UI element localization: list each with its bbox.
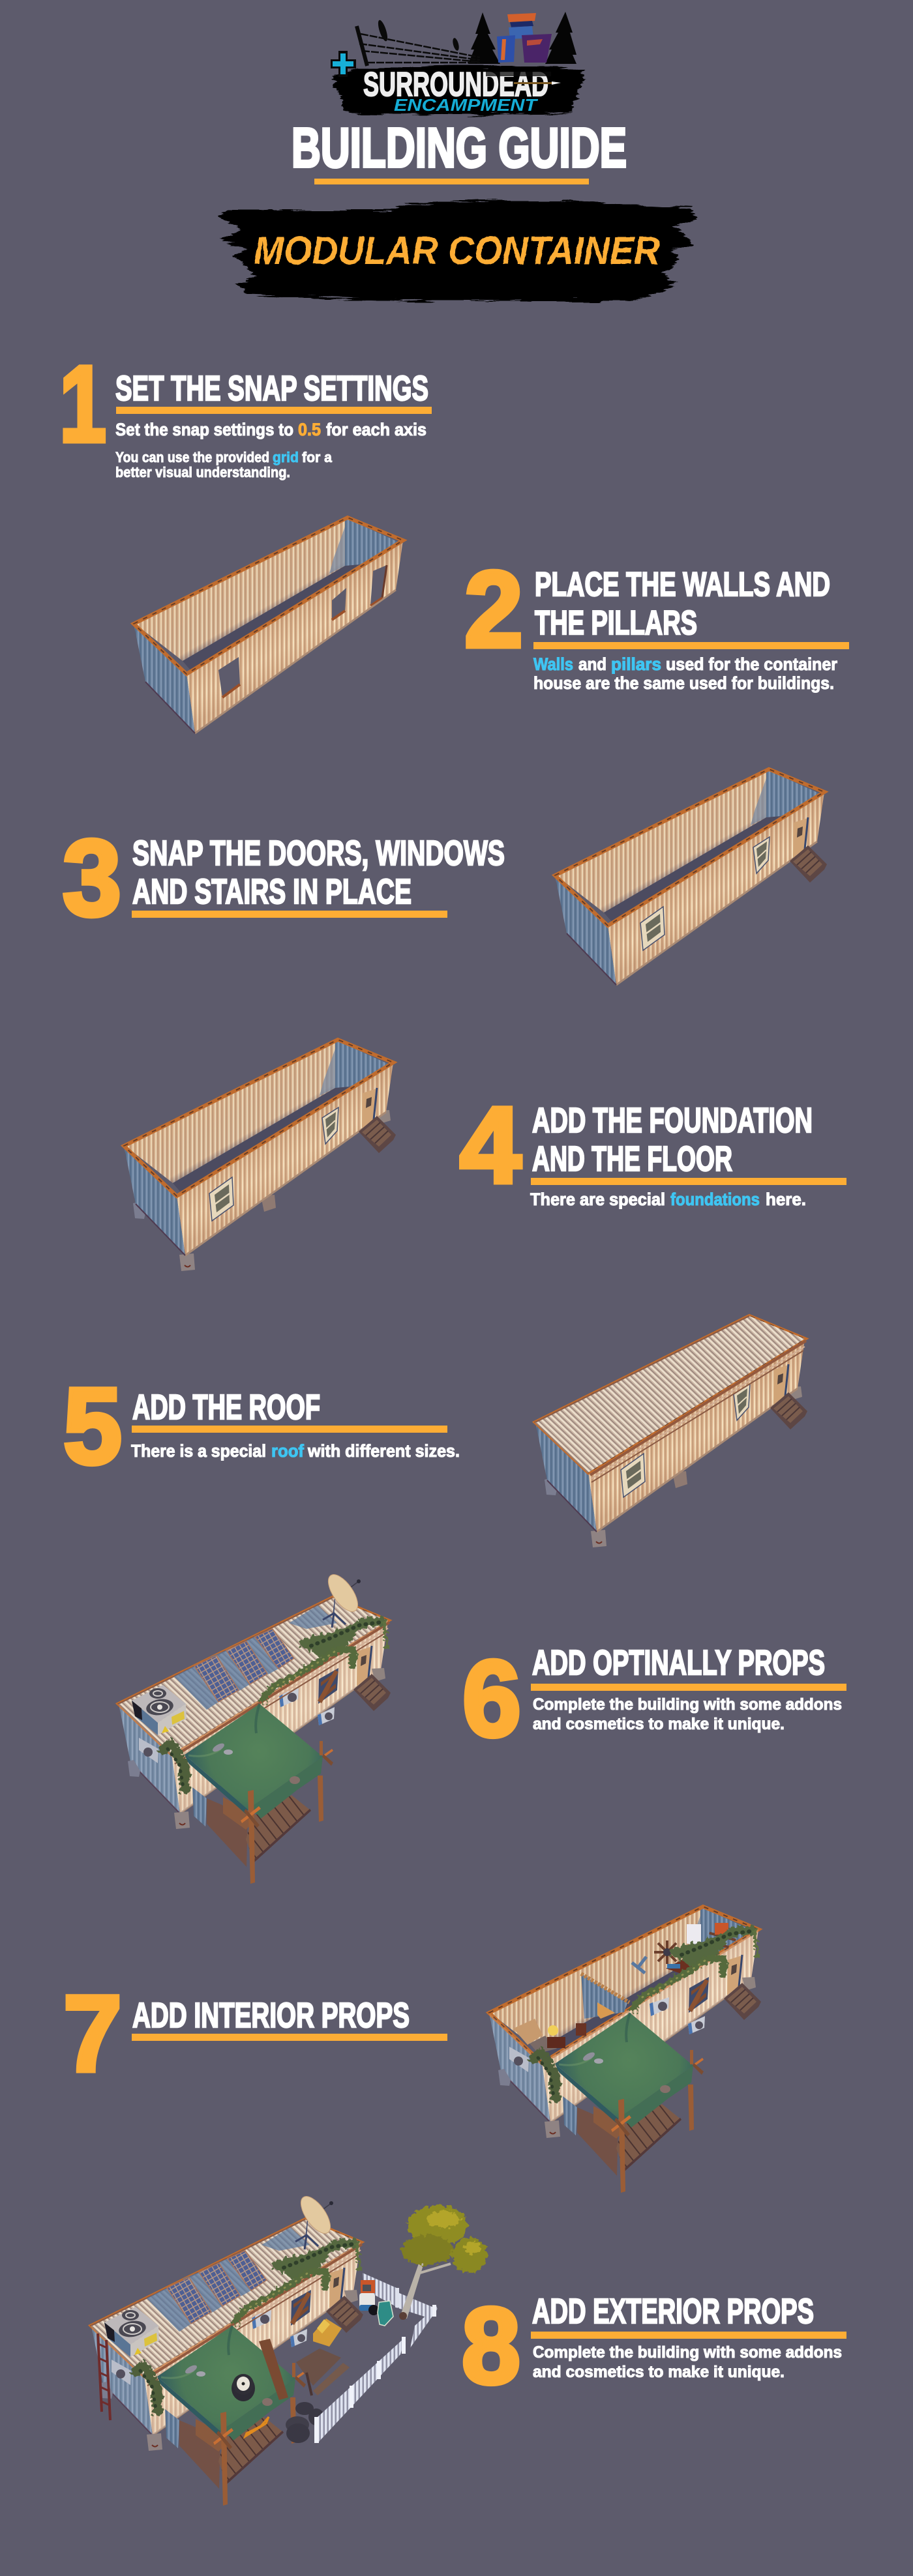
step 1 grid note: better visual understanding.	[115, 464, 290, 480]
image: container with doors, windows and stairs	[555, 769, 827, 985]
step 2 description: used for the container	[666, 654, 837, 674]
step number 1: 1	[59, 344, 106, 465]
step 5 description: roof	[271, 1441, 305, 1461]
step 2 description: pillars	[611, 654, 661, 674]
image: building with optional props	[119, 1570, 391, 1884]
shelves with orange radio	[709, 1923, 736, 1948]
step 3 underline	[132, 911, 447, 918]
logo subtitle ENCAMPMENT: ENCAMPMENT	[394, 95, 538, 115]
step 3 heading: AND STAIRS IN PLACE	[132, 872, 412, 911]
tire stacks	[286, 2402, 324, 2443]
step 8 description: and cosmetics to make it unique.	[533, 2363, 785, 2381]
image: walls and pillars shell with openings	[134, 518, 403, 733]
title: Building Guide: BUILDING GUIDE	[292, 117, 627, 179]
title underline	[314, 179, 589, 184]
step 4 description: foundations	[670, 1190, 760, 1209]
step 1 snap instruction: 0.5	[298, 420, 321, 439]
step 1 snap instruction: for each axis	[326, 420, 427, 439]
ceiling fan and shadow	[632, 1940, 680, 1973]
nightstand and lamp	[547, 2023, 586, 2048]
panel: step 7 add interior props	[63, 1974, 447, 2094]
logo: Surroundead Encampment	[331, 12, 583, 115]
step 1 heading: SET THE SNAP SETTINGS	[115, 369, 428, 408]
step 5 description: There is a special	[131, 1441, 266, 1461]
panel: step 6 add optionally props	[462, 1639, 846, 1759]
image: building with exterior props	[91, 2191, 487, 2506]
step 2 underline	[533, 642, 849, 649]
step 6 description: and cosmetics to make it unique.	[533, 1715, 785, 1733]
black ball	[368, 2305, 379, 2315]
step 5 underline	[132, 1426, 447, 1433]
lawn chair	[378, 2301, 393, 2326]
step number 3: 3	[63, 818, 121, 939]
logo bullet streak	[486, 72, 561, 85]
desk with books and chair	[666, 1947, 708, 1974]
step 2 heading: THE PILLARS	[535, 604, 697, 642]
step 6 underline	[531, 1684, 846, 1691]
wall cabinet	[687, 1924, 701, 1944]
step 4 underline	[531, 1178, 846, 1185]
picnic table	[296, 2349, 350, 2395]
armchair	[313, 2319, 342, 2347]
step number 5: 5	[63, 1366, 122, 1487]
logo medical plus	[331, 51, 356, 77]
panel: step 8 add exterior props	[462, 2286, 846, 2407]
panel: step 2 place the walls and the pillars	[464, 549, 849, 693]
step 8 description: Complete the building with some addons	[533, 2343, 842, 2362]
logo crows	[376, 19, 460, 51]
banner heading: MODULAR CONTAINER	[254, 229, 660, 272]
step number 8: 8	[462, 2286, 520, 2407]
step 2 description: house are the same used for buildings.	[533, 673, 834, 693]
step 4 description: There are special	[530, 1190, 665, 1209]
banner: Modular Container	[217, 201, 696, 302]
birch tree	[399, 2205, 487, 2320]
step number 7: 7	[63, 1974, 122, 2094]
barrel with television	[359, 2280, 375, 2311]
logo black brush background	[334, 65, 583, 115]
red ladder	[98, 2334, 110, 2420]
step 1 grid note: for a	[302, 449, 333, 465]
step 4 description: here.	[766, 1190, 806, 1209]
logo barbed wire fence	[357, 26, 480, 66]
logo tree silhouette left	[468, 12, 500, 64]
step 3 heading: SNAP THE DOORS, WINDOWS	[132, 834, 505, 873]
step 6 description: Complete the building with some addons	[533, 1695, 842, 1714]
panel: step 5 add the roof	[63, 1366, 460, 1487]
bed	[513, 2019, 557, 2053]
step number 4: 4	[460, 1085, 521, 1206]
generator under tarp	[245, 2417, 269, 2437]
step 2 description: Walls	[533, 654, 573, 674]
step number 6: 6	[462, 1639, 521, 1759]
step 1 underline	[116, 407, 432, 414]
image: building with interior props	[489, 1907, 761, 2193]
logo wordmark SURROUNDEAD: SURROUNDEAD	[363, 66, 548, 104]
tire on tarp	[232, 2374, 255, 2401]
panel: step 1 set the snap settings	[59, 344, 432, 480]
front picket fence	[314, 2337, 406, 2443]
logo watchtower	[497, 13, 552, 63]
image: container with roof	[535, 1316, 807, 1547]
logo tree silhouette right	[545, 12, 576, 64]
step 1 grid note: grid	[273, 449, 299, 465]
interior partition wall	[581, 1974, 629, 2019]
step number 2: 2	[464, 549, 523, 670]
step 7 underline	[132, 2034, 447, 2041]
banner black brush stroke	[217, 201, 696, 302]
step 5 description: with different sizes.	[307, 1441, 460, 1461]
panel: step 4 add the foundation and the floor	[460, 1085, 846, 1209]
fence back sections	[363, 2273, 438, 2348]
panel: step 3 snap the doors, windows and stairs	[63, 818, 505, 939]
step 1 snap instruction: Set the snap settings to	[115, 420, 293, 439]
plank on tarp	[259, 2339, 288, 2400]
step 4 heading: AND THE FLOOR	[532, 1139, 732, 1178]
step 7 heading: ADD INTERIOR PROPS	[132, 1996, 410, 2035]
step 1 grid note: You can use the provided	[115, 449, 269, 465]
image: container on foundation	[124, 1040, 396, 1271]
step 2 description: and	[578, 654, 606, 674]
step 8 underline	[531, 2332, 846, 2339]
step 5 heading: ADD THE ROOF	[132, 1388, 320, 1427]
building base	[91, 2191, 363, 2506]
